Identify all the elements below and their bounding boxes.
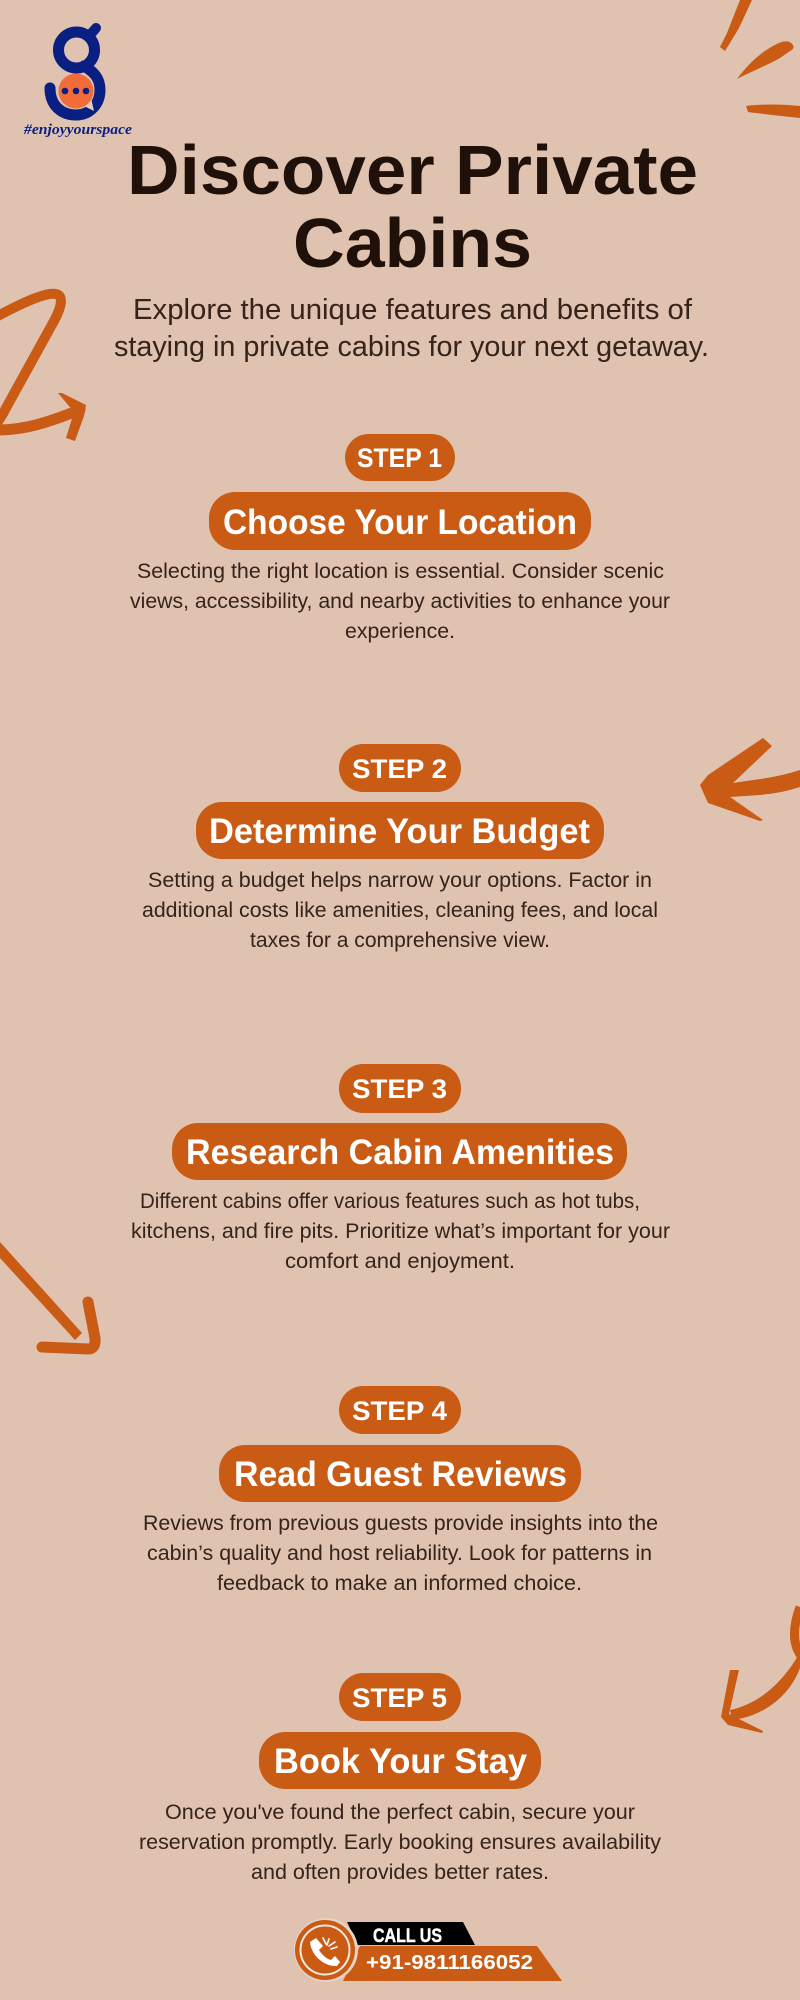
step 1 description [130,559,670,643]
panel: step 5 [139,1673,661,1884]
step 2 badge [339,744,461,792]
step 5 description: and often provides better rates. [251,1860,549,1884]
subtitle: Explore the unique features and benefits of [133,294,693,326]
title: Cabins [293,204,532,282]
subtitle [114,294,709,363]
step 3 heading [172,1123,627,1180]
step 1 badge: STEP 1 [357,443,442,473]
step 2 heading: Determine Your Budget [209,812,590,851]
step 1 heading [209,492,591,550]
decorative burst: top right [720,0,800,118]
step 2 description: additional costs like amenities, cleaning fees, and local [142,898,658,922]
arrow: top-left squiggle [0,294,86,441]
step 2 description: Setting a budget helps narrow your options. Factor in [148,868,652,892]
step 3 description [131,1189,670,1273]
step 3 heading: Research Cabin Amenities [186,1133,614,1172]
step 5 badge: STEP 5 [352,1683,447,1713]
arrow: pointing down-right [0,1242,95,1349]
black call us banner [347,1922,475,1947]
step 4 description [143,1511,658,1595]
panel: step 4 [143,1386,658,1595]
step 5 description: Once you've found the perfect cabin, secure your [165,1800,635,1824]
step 2 description: taxes for a comprehensive view. [250,928,550,952]
step 4 description: Reviews from previous guests provide insights into the [143,1511,658,1535]
step 4 description: feedback to make an informed choice. [217,1571,582,1595]
arrow: curved pointing down-left [721,1607,800,1733]
step 1 description: Selecting the right location is essential. Consider scenic [137,559,664,583]
step 4 badge [339,1386,461,1434]
step 5 description: reservation promptly. Early booking ensures availability [139,1830,661,1854]
step 1 badge [345,434,455,481]
call to action [294,1918,562,1982]
step 4 heading: Read Guest Reviews [234,1455,567,1494]
arrow: pointing left [700,738,800,821]
logo tagline: #enjoyyourspace [23,122,132,138]
subtitle: staying in private cabins for your next getaway. [114,331,709,363]
step 4 heading [219,1445,581,1502]
panel: step 2 [142,744,658,952]
step 3 badge: STEP 3 [352,1074,447,1104]
icon: phone in circle [294,1918,358,1982]
step 1 heading: Choose Your Location [223,503,577,542]
step 3 badge [339,1064,461,1113]
step 1 description: views, accessibility, and nearby activities to enhance your [130,589,670,613]
step 3 description: comfort and enjoyment. [285,1249,515,1273]
logo [23,28,132,138]
step 2 badge: STEP 2 [352,754,447,784]
step 4 description: cabin’s quality and host reliability. Look for patterns in [147,1541,652,1565]
step 3 description: kitchens, and fire pits. Prioritize what’s important for your [131,1219,670,1243]
panel: step 1 [130,434,670,643]
black call us banner: CALL US [373,1925,442,1947]
step 2 heading [196,802,604,859]
orange phone number banner: +91-9811166052 [366,1951,533,1974]
step 2 description [142,868,658,952]
panel: step 3 [131,1064,670,1273]
step 5 heading [259,1732,541,1789]
orange phone number banner [343,1946,562,1981]
step 5 badge [339,1673,461,1721]
step 5 description [139,1800,661,1884]
title: Discover Private [127,131,698,209]
icon: letter g with speech bubble [50,28,100,115]
title [127,131,698,282]
step 5 heading: Book Your Stay [274,1742,528,1781]
step 1 description: experience. [345,619,455,643]
step 3 description: Different cabins offer various features such as hot tubs, [140,1189,640,1213]
step 4 badge: STEP 4 [352,1396,447,1426]
